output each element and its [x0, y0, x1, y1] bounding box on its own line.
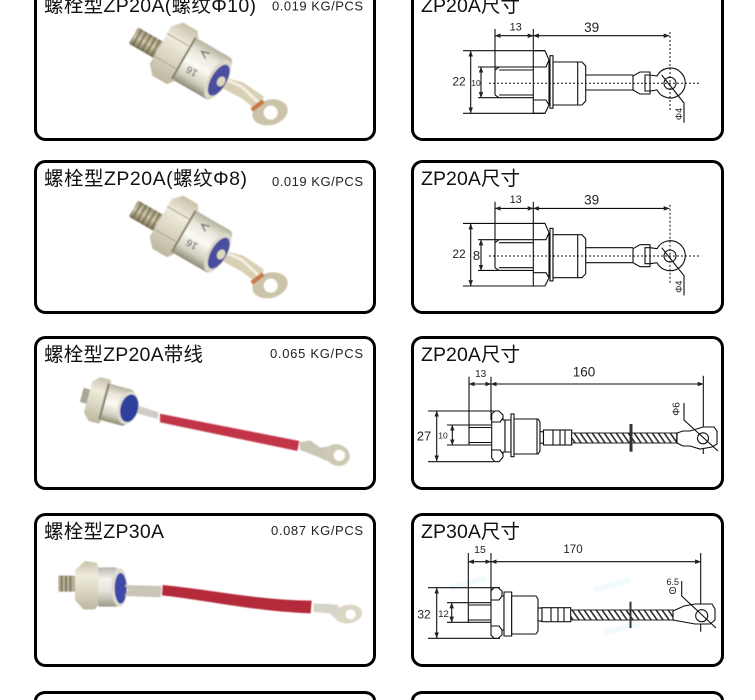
- heading: ZP20A with wire: 螺栓型ZP20A带线: [44, 344, 203, 366]
- panel: next photo card, cropped: [36, 692, 374, 700]
- diagram: ZP20A wired dimensions: [417, 365, 718, 462]
- panel: ZP20A thread M8 photo card: [36, 162, 374, 312]
- diagram: ZP20A wired dimensions: 10: [438, 430, 448, 440]
- diagram: ZP20A dimensions with 8 thread: 8: [473, 248, 480, 263]
- heading: ZP20A size: ZP20A尺寸: [421, 344, 520, 366]
- heading: ZP20A M8: 螺栓型ZP20A(螺纹Φ8): [44, 168, 247, 190]
- diagram: ZP20A wired dimensions: 27: [417, 428, 431, 444]
- diagram: ZP20A dimensions with 10 thread: 39: [584, 20, 599, 35]
- photo: stud diode with short lead: [121, 177, 291, 302]
- photo: stud diode with red wire: [76, 374, 353, 469]
- diagram: ZP20A wired dimensions: 13: [475, 369, 487, 380]
- diagram: ZP20A dimensions with 8 thread: 22: [452, 247, 466, 261]
- photo: stud diode with short lead: 16: [184, 236, 200, 251]
- diagram: ZP30A dimensions: 6.5: [666, 577, 679, 587]
- diagram: ZP20A dimensions with 8 thread: Φ4: [674, 281, 684, 293]
- diagram: ZP20A dimensions with 8 thread: 39: [584, 193, 599, 208]
- diagram: ZP30A dimensions: 12: [438, 609, 449, 620]
- panel: ZP20A with wire photo card: [36, 338, 374, 488]
- weight label: 0.019 KG/PCS: [272, 174, 363, 189]
- heading: ZP30A: 螺栓型ZP30A: [44, 521, 164, 543]
- panel: ZP20A with wire dimension drawing: [412, 338, 722, 488]
- photo: ZP30A stud diode with red wire: [58, 561, 363, 625]
- diagram: ZP30A dimensions: Θ: [669, 586, 677, 597]
- weight label: 0.087 KG/PCS: [271, 523, 363, 538]
- panel: next dimension card, cropped: [412, 692, 722, 700]
- panel: ZP20A dimension drawing 1: [412, 0, 722, 140]
- diagram: ZP20A dimensions with 10 thread: 22: [452, 74, 466, 88]
- diagram: ZP20A dimensions with 10 thread: 13: [510, 22, 522, 34]
- diagram: ZP30A dimensions: 32: [417, 608, 431, 622]
- diagram: ZP20A dimensions with 10 thread: 10: [471, 78, 481, 88]
- heading: ZP20A size: ZP20A尺寸: [421, 168, 520, 190]
- diagram: ZP30A dimensions: 170: [563, 544, 583, 556]
- diagram: ZP30A dimensions: [417, 544, 716, 638]
- photo: stud diode with short lead: [121, 4, 291, 129]
- diagram: ZP20A dimensions with 8 thread: 13: [510, 194, 522, 206]
- diagram: ZP20A dimensions with 10 thread: [452, 20, 699, 123]
- diagram: ZP30A dimensions: 15: [474, 544, 486, 556]
- weight label: 0.065 KG/PCS: [270, 346, 363, 361]
- panel: ZP20A dimension drawing 2: [412, 162, 722, 312]
- panel: ZP30A dimension drawing: [412, 514, 722, 666]
- diagram: ZP20A dimensions with 8 thread: [452, 193, 699, 295]
- panel: ZP30A photo card: [36, 514, 374, 666]
- diagram: ZP20A dimensions with 10 thread: Φ4: [674, 108, 684, 120]
- diagram: ZP20A wired dimensions: 160: [573, 365, 595, 380]
- heading: ZP30A size: ZP30A尺寸: [421, 521, 520, 543]
- photo: stud diode with short lead: 16: [184, 63, 200, 78]
- panel: ZP20A thread M10 photo card: [36, 0, 374, 140]
- diagram: ZP20A wired dimensions: Φ6: [672, 402, 682, 416]
